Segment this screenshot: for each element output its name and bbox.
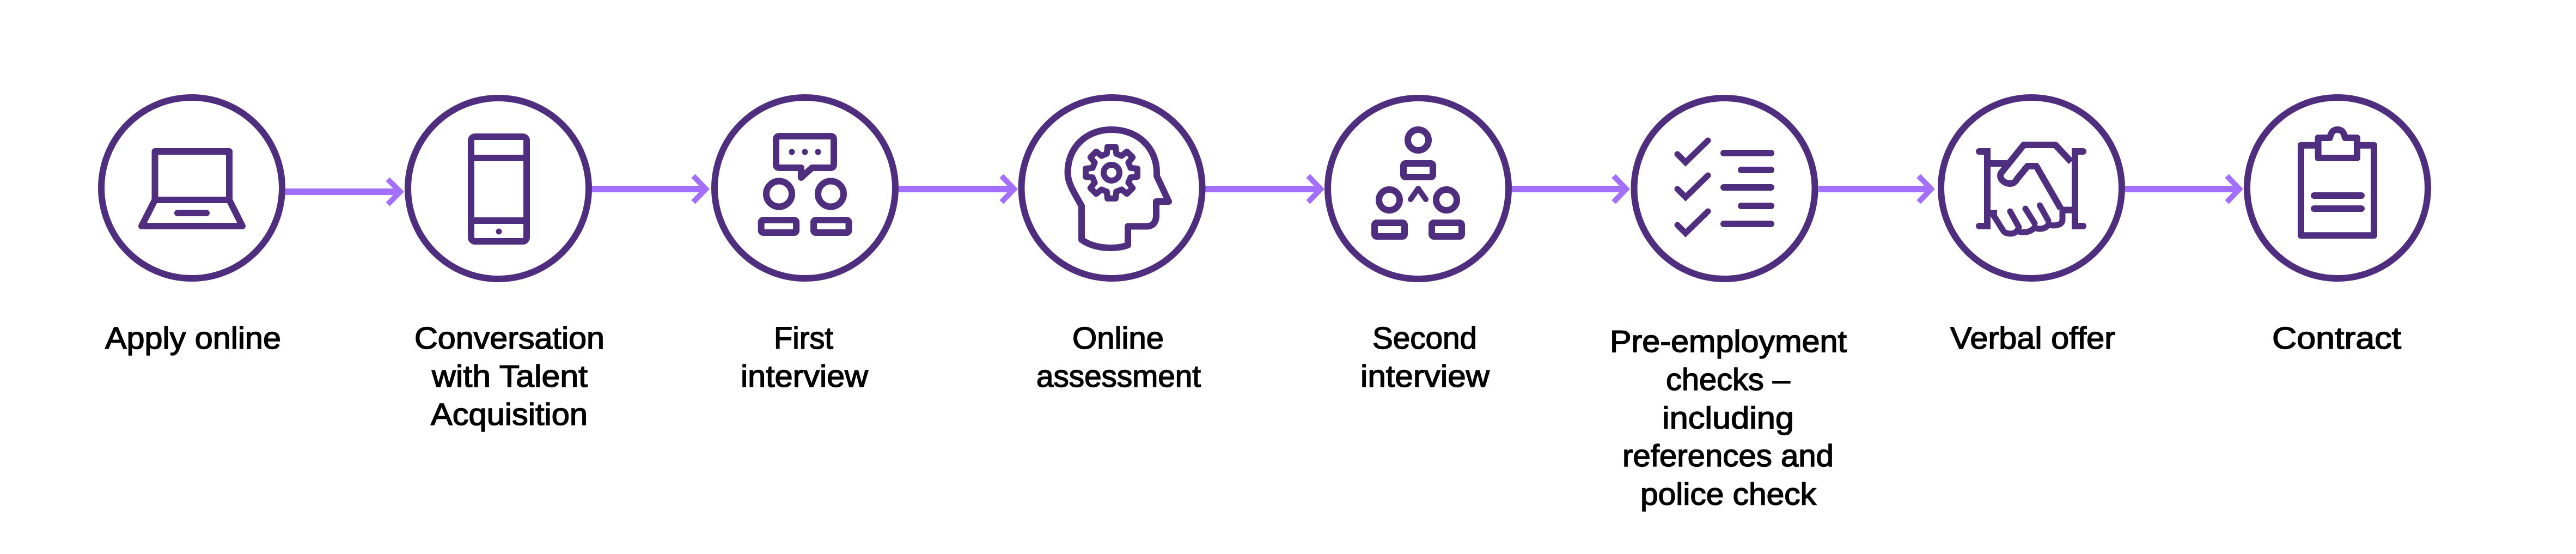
label: first interview: interview: [741, 359, 869, 394]
label: second interview: Second: [1372, 321, 1477, 356]
arrow: first interview to online assessment: [899, 176, 1014, 202]
label: pre-employment checks: police check: [1640, 477, 1817, 512]
icon: laptop in circle: [101, 98, 282, 278]
label: online assessment: Online: [1072, 321, 1164, 356]
icon: head with gear in circle: [1022, 98, 1202, 278]
icon: two people talking in circle: [715, 98, 895, 278]
label: apply online: Apply online: [105, 321, 281, 356]
icon: smartphone in circle: [408, 98, 589, 279]
label: first interview: [741, 321, 869, 394]
label: online assessment: assessment: [1036, 359, 1201, 394]
label: conversation with talent acquisition: Acquisition: [431, 397, 588, 432]
arrow: apply online to conversation: [285, 179, 400, 204]
icon: checklist in circle: [1634, 98, 1815, 279]
icon: handshake in circle: [1941, 98, 2122, 278]
label: conversation with talent acquisition: with Talent: [431, 359, 588, 394]
label: second interview: [1360, 321, 1490, 394]
label: conversation with talent acquisition: Conversation: [414, 321, 605, 356]
label: verbal offer: Verbal offer: [1950, 321, 2115, 356]
arrow: online assessment to second interview: [1205, 176, 1321, 202]
label: contract: Contract: [2272, 321, 2401, 356]
arrow: verbal offer to contract: [2125, 176, 2239, 202]
label: first interview: First: [774, 321, 833, 356]
label: conversation with talent acquisition: [414, 321, 605, 432]
label: online assessment: [1036, 321, 1201, 394]
arrow: second interview to checks: [1512, 176, 1626, 202]
label: pre-employment checks: including: [1662, 401, 1794, 436]
arrow: conversation to first interview: [592, 176, 706, 202]
label: second interview: interview: [1360, 359, 1490, 394]
label: pre-employment checks: references and: [1622, 439, 1834, 473]
label: pre-employment checks: checks –: [1666, 362, 1790, 397]
label: pre-employment checks: [1610, 324, 1847, 512]
label: pre-employment checks: Pre-employment: [1610, 324, 1847, 359]
icon: clipboard in circle: [2247, 98, 2428, 278]
icon: three people in circle: [1328, 98, 1509, 279]
arrow: checks to verbal offer: [1818, 176, 1931, 202]
